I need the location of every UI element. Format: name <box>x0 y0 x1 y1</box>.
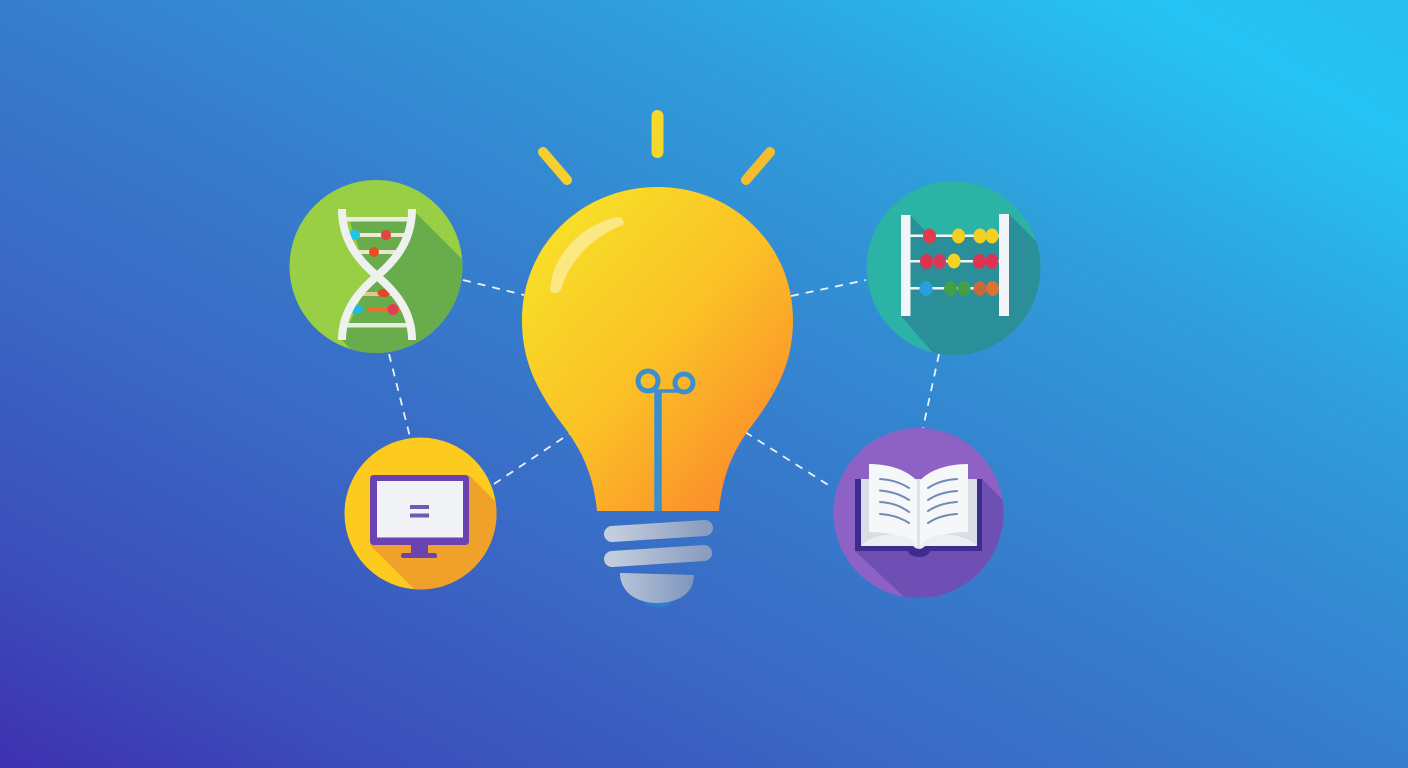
monitor stand <box>401 545 437 558</box>
screw base <box>612 528 705 559</box>
helix strands <box>342 209 412 340</box>
light rays above bulb <box>543 116 770 180</box>
monitor frame <box>370 475 469 545</box>
left page <box>869 464 918 548</box>
bulb glass <box>522 187 793 511</box>
right page <box>919 464 968 548</box>
central lightbulb <box>522 187 793 607</box>
base cap <box>620 573 694 603</box>
icon: open book in purple circle <box>834 428 1004 598</box>
illustration: lightbulb connected to four topic icons <box>290 110 1040 607</box>
bulb highlight <box>550 217 623 294</box>
frame posts <box>901 214 1009 316</box>
icon: DNA helix in green circle <box>290 180 462 353</box>
icon: computer monitor in yellow circle <box>344 438 496 590</box>
base pairs <box>346 217 408 328</box>
gutter shadow <box>917 482 920 548</box>
screen <box>377 481 463 538</box>
rods <box>908 234 1001 290</box>
text lines <box>880 479 957 523</box>
filament <box>638 371 693 511</box>
base tip <box>644 600 672 607</box>
under pages <box>861 479 977 546</box>
book cover <box>855 479 982 557</box>
dashed connector lines <box>389 280 939 488</box>
icon: abacus in teal circle <box>866 181 1040 355</box>
lower page sweep <box>861 535 977 549</box>
equals symbol <box>410 505 429 518</box>
beads <box>920 228 999 296</box>
